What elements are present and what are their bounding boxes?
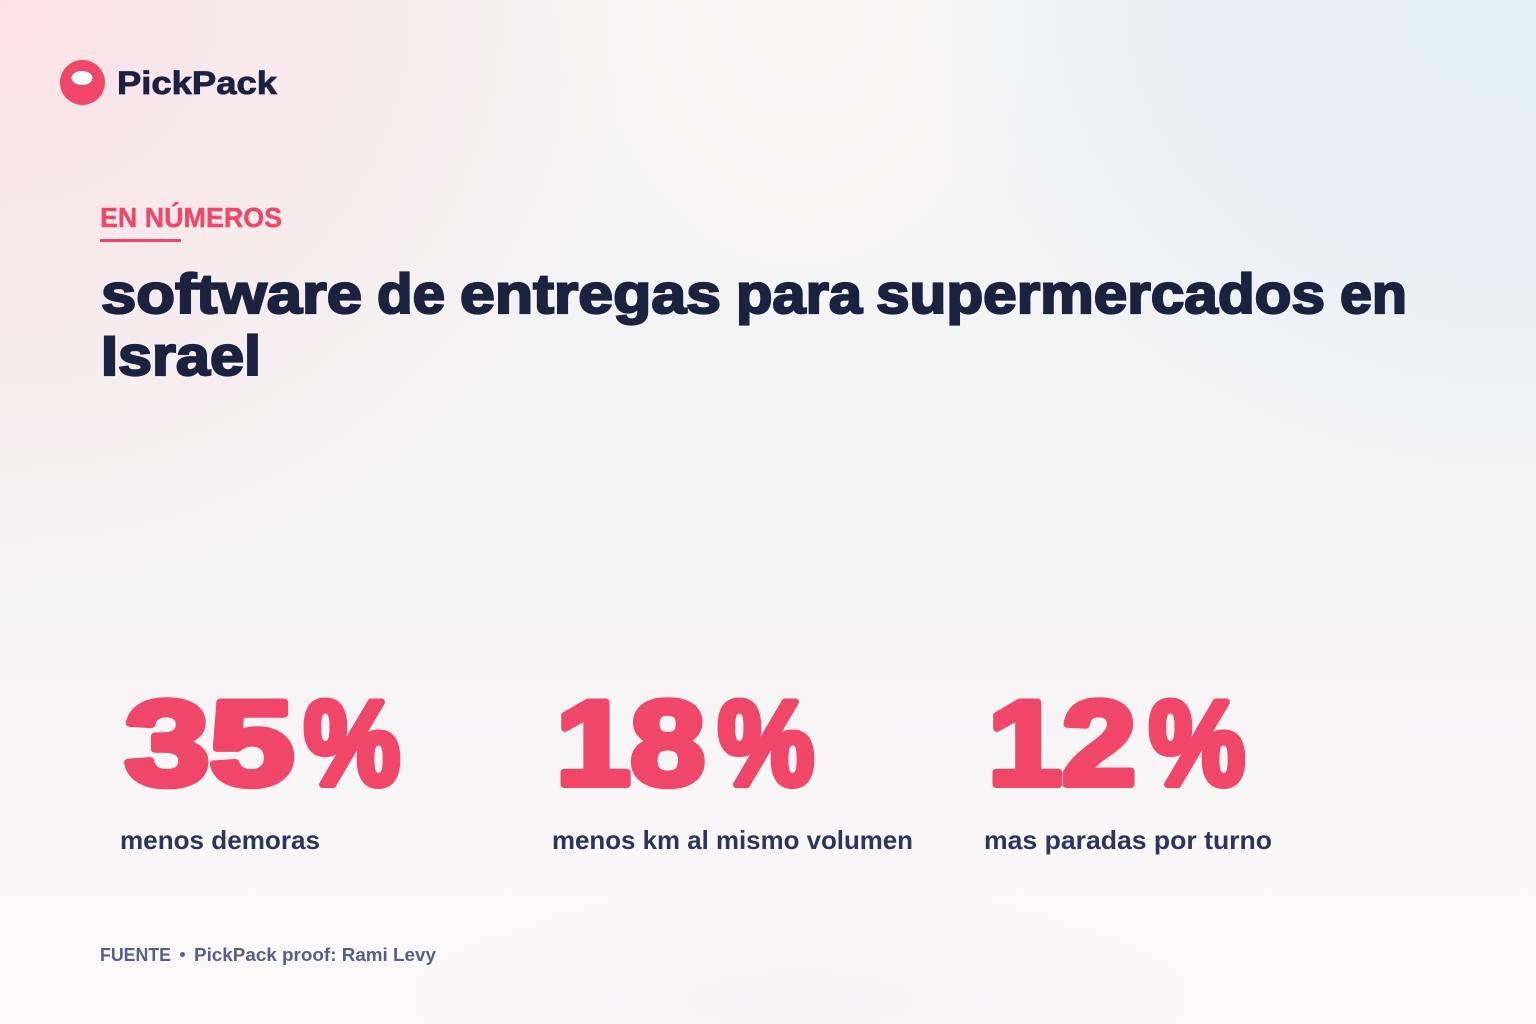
stat: 35%: 35 [125,676,294,810]
stat: 12%: 12 [988,676,1136,810]
stat: 18%: menos km al mismo volumen [552,825,913,855]
source footer [100,945,436,965]
eyebrow heading: EN NÚMEROS [100,202,282,233]
stat: 12%: mas paradas por turno [984,825,1272,855]
stat: 18% [552,676,913,855]
source footer: PickPack proof: Rami Levy [194,945,436,965]
brand name: PickPack [117,65,277,101]
stat: 18%: 18 [556,676,705,810]
stat: 12%: % [1149,676,1245,810]
title: de [377,262,445,325]
stat: 35%: % [304,676,400,810]
source footer: FUENTE [100,945,171,965]
icon: logo mark [60,60,105,105]
title: software [101,262,362,325]
stat: 18%: % [718,676,814,810]
stat: 35% [120,676,400,855]
stat: 12% [984,676,1272,855]
title: entregas [460,262,721,325]
title: Israel [101,324,261,387]
title: para [736,262,863,325]
brand logo [60,60,277,105]
title: en [1340,262,1407,325]
stat: 35%: menos demoras [120,825,320,855]
title [101,262,1407,387]
title: supermercados [876,262,1325,325]
